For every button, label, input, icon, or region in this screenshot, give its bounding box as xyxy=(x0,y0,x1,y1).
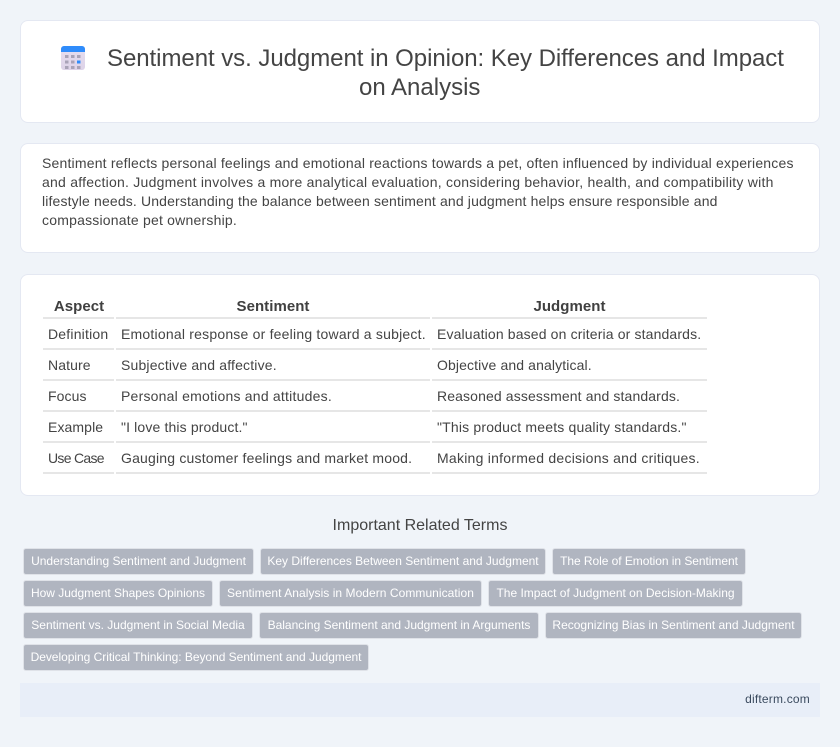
footer credit: difterm.com xyxy=(745,692,810,706)
comparison table: Aspect xyxy=(54,298,104,315)
related term tags: Key Differences Between Sentiment and Judgment xyxy=(267,554,539,568)
comparison table: Focus xyxy=(48,388,87,404)
related term tags: How Judgment Shapes Opinions xyxy=(31,586,205,600)
header card xyxy=(20,20,820,123)
table card xyxy=(20,274,820,496)
related term tags: Sentiment vs. Judgment in Social Media xyxy=(31,618,245,632)
footer bar xyxy=(20,683,820,717)
related term tags: Understanding Sentiment and Judgment xyxy=(31,554,246,568)
comparison table: Example xyxy=(48,419,103,435)
comparison table: Emotional response or feeling toward a subject. xyxy=(121,326,426,342)
comparison table: Objective and analytical. xyxy=(437,357,592,373)
comparison table: Use Case xyxy=(48,450,104,466)
intro text xyxy=(42,155,794,228)
related terms heading: Important Related Terms xyxy=(333,517,507,534)
comparison table: "I love this product." xyxy=(121,419,248,435)
comparison table xyxy=(43,298,707,474)
intro text: and affection. Judgment involves a more analytical evaluation, considering behavior, health, and compatibility with xyxy=(42,174,774,190)
intro text: compassionate pet ownership. xyxy=(42,212,237,228)
related term tags: Sentiment Analysis in Modern Communication xyxy=(227,586,474,600)
comparison table: Making informed decisions and critiques. xyxy=(437,450,700,466)
comparison table: Gauging customer feelings and market mood. xyxy=(121,450,412,466)
comparison table: "This product meets quality standards." xyxy=(437,419,687,435)
comparison table: Sentiment xyxy=(237,298,309,315)
title: on Analysis xyxy=(359,74,480,101)
comparison table: Personal emotions and attitudes. xyxy=(121,388,332,404)
related term tags: Balancing Sentiment and Judgment in Arguments xyxy=(268,618,530,632)
icon: calendar xyxy=(61,46,85,70)
related term tags: The Impact of Judgment on Decision-Making xyxy=(496,586,735,600)
intro card xyxy=(20,143,820,253)
related term tags: Developing Critical Thinking: Beyond Sentiment and Judgment xyxy=(31,650,361,664)
comparison table: Evaluation based on criteria or standards. xyxy=(437,326,701,342)
related term tags: The Role of Emotion in Sentiment xyxy=(560,554,738,568)
comparison table: Reasoned assessment and standards. xyxy=(437,388,680,404)
title: Sentiment vs. Judgment in Opinion: Key Differences and Impact xyxy=(107,45,784,72)
comparison table: Nature xyxy=(48,357,91,373)
related term tags: Recognizing Bias in Sentiment and Judgment xyxy=(552,618,795,632)
related term tags xyxy=(23,548,802,671)
title xyxy=(107,45,784,101)
intro text: Sentiment reflects personal feelings and emotional reactions towards a pet, often influenced by individual experiences xyxy=(42,155,794,171)
intro text: lifestyle needs. Understanding the balance between sentiment and judgment helps ensure responsible and xyxy=(42,193,718,209)
comparison table: Subjective and affective. xyxy=(121,357,277,373)
comparison table: Definition xyxy=(48,326,108,342)
comparison table: Judgment xyxy=(533,298,606,315)
